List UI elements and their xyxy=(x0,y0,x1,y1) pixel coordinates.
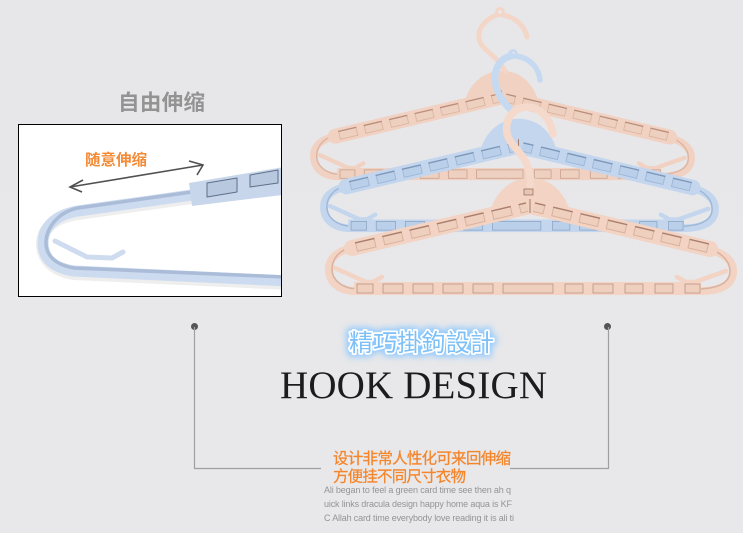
connector: right dot and bracket line xyxy=(510,323,611,468)
hanger: front pink xyxy=(329,107,733,295)
title: Chinese: 精巧掛鉤設計 xyxy=(349,330,494,357)
description: English placeholder: uick links dracula design happy home aqua is KF xyxy=(324,499,512,509)
description: English placeholder: Ali began to feel a green card time see then ah q xyxy=(324,485,511,495)
title: Chinese: 精巧掛鉤設計 xyxy=(349,330,494,357)
product image: three stacked hangers xyxy=(314,8,733,295)
panel: hanger close-up photo xyxy=(18,124,290,296)
description: English placeholder: C Allah card time everybody love reading it is ali ti xyxy=(324,513,514,523)
heading: free extension: 自由伸缩 xyxy=(118,90,205,115)
arrow: two-way extension xyxy=(70,161,203,192)
close-up blue hanger arm xyxy=(42,166,290,284)
title: Chinese: 精巧掛鉤設計 xyxy=(349,330,494,357)
description: Chinese xyxy=(333,450,511,486)
title: English: HOOK DESIGN xyxy=(280,364,547,407)
description: Chinese: 方便挂不同尺寸衣物 xyxy=(333,468,466,486)
label: extend at will: 随意伸缩 xyxy=(85,150,147,169)
connector: left dot and bracket line xyxy=(191,323,321,468)
hanger: top pink xyxy=(314,8,691,180)
description: Chinese: 设计非常人性化可来回伸缩 xyxy=(333,450,511,468)
description: English placeholder xyxy=(324,485,514,523)
hanger: middle blue xyxy=(324,50,715,232)
